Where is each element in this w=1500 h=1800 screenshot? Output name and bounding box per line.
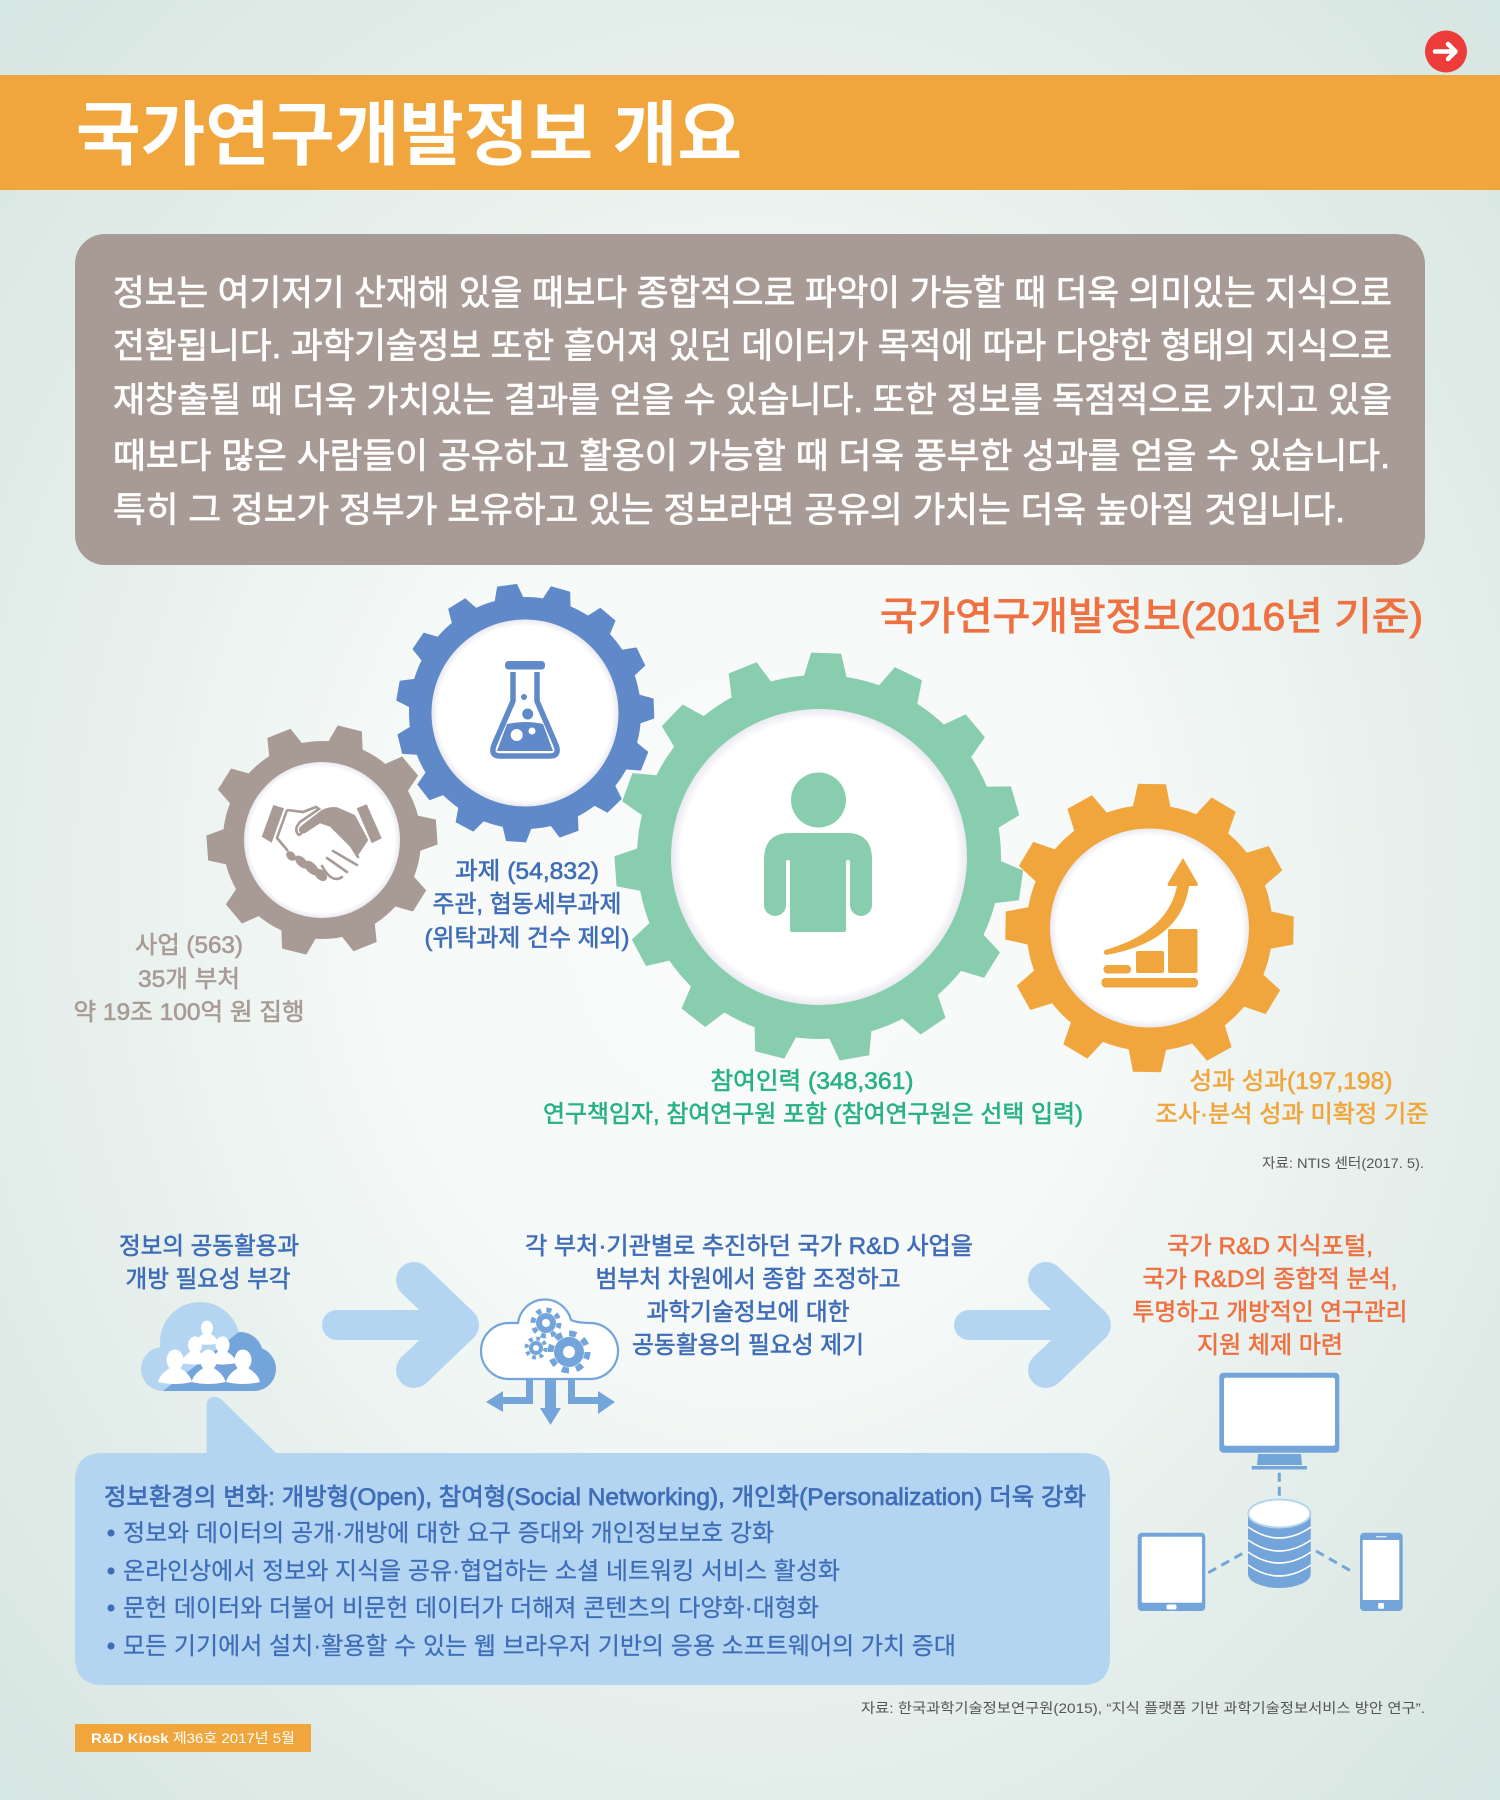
publication tag (75, 1724, 311, 1752)
callout list: 온라인상에서 정보와 지식을 공유·협업하는 소셜 네트워킹 서비스 활성화 (123, 1558, 840, 1585)
flow text: coordination (525, 1233, 973, 1359)
callout list: 모든 기기에서 설치·활용할 수 있는 웹 브라우저 기반의 응용 소프트웨어의 가치 증대 (123, 1633, 956, 1660)
source: NTIS: 자료: NTIS 센터(2017. 5). (1262, 1155, 1424, 1171)
flow text: public use (119, 1233, 299, 1293)
label: projects: 주관, 협동세부과제 (432, 891, 622, 918)
label: business (74, 932, 304, 1026)
title banner (0, 75, 1500, 190)
label: outcomes (1156, 1068, 1428, 1128)
flow text: knowledge portal: 국가 R&D의 종합적 분석, (1142, 1266, 1398, 1293)
introduction text: 때보다 많은 사람들이 공유하고 활용이 가능할 때 더욱 풍부한 성과를 얻을 수 있습니다. (113, 437, 1390, 476)
callout list: 정보와 데이터의 공개·개방에 대한 요구 증대와 개인정보보호 강화 (123, 1520, 774, 1547)
callout list (107, 1520, 956, 1660)
label: personnel: 참여인력 (348,361) (710, 1068, 914, 1095)
flow text: coordination: 각 부처·기관별로 추진하던 국가 R&D 사업을 (525, 1233, 973, 1260)
icon: gears cloud (481, 1299, 618, 1425)
label: projects: (위탁과제 건수 제외) (424, 925, 630, 952)
flow text: knowledge portal: 투명하고 개방적인 연구관리 (1132, 1299, 1408, 1326)
flow text: knowledge portal: 국가 R&D 지식포털, (1167, 1233, 1373, 1260)
introduction text: 특히 그 정보가 정부가 보유하고 있는 정보라면 공유의 가치는 더욱 높아질 것입니다. (113, 491, 1345, 530)
flow text: knowledge portal: 지원 체제 마련 (1197, 1332, 1343, 1359)
icon: people cloud (141, 1302, 276, 1391)
label: personnel: 연구책임자, 참여연구원 포함 (참여연구원은 선택 입력) (543, 1101, 1083, 1128)
flow text: knowledge portal (1132, 1233, 1408, 1359)
icon: handshake (262, 804, 382, 883)
gear: personnel (green) (614, 652, 1024, 1062)
flow text: coordination: 공동활용의 필요성 제기 (632, 1332, 864, 1359)
gear: outcomes (orange) (1005, 784, 1294, 1072)
icon: flask (493, 661, 557, 756)
gear: projects (blue) (395, 583, 654, 843)
icon: red next arrow (1425, 30, 1467, 72)
flow text: coordination: 범부처 차원에서 종합 조정하고 (596, 1266, 900, 1293)
arrow: first (337, 1280, 461, 1370)
callout heading: 정보환경의 변화: 개방형(Open), 참여형(Social Networking), 개인화(Personalization) 더욱 강화 (104, 1484, 1086, 1511)
icon: person (764, 772, 872, 932)
label: business: 사업 (563) (135, 932, 243, 959)
callout list: 문헌 데이터와 더불어 비문헌 데이터가 더해져 콘텐츠의 다양화·대형화 (123, 1595, 819, 1622)
label: business: 약 19조 100억 원 집행 (74, 999, 304, 1026)
arrow: second (969, 1280, 1093, 1370)
icon: connected devices (1138, 1373, 1403, 1611)
introduction text: 정보는 여기저기 산재해 있을 때보다 종합적으로 파악이 가능할 때 더욱 의미있는 지식으로 (113, 274, 1392, 313)
flow text: public use: 개방 필요성 부각 (126, 1266, 290, 1293)
title: 국가연구개발정보 개요 (76, 96, 742, 174)
chart heading: 국가연구개발정보(2016년 기준) (880, 596, 1423, 639)
label: projects (424, 858, 630, 952)
label: projects: 과제 (54,832) (455, 858, 599, 885)
publication tag text: R&D Kiosk 제36호 2017년 5월 (91, 1730, 295, 1746)
label: personnel (543, 1068, 1083, 1128)
flow text: coordination: 과학기술정보에 대한 (646, 1299, 850, 1326)
introduction text (113, 274, 1392, 530)
source: KISTI report: 자료: 한국과학기술정보연구원(2015), “지식 플랫폼 기반 과학기술정보서비스 방안 연구”. (861, 1700, 1425, 1716)
label: outcomes: 성과 성과(197,198) (1190, 1068, 1392, 1095)
introduction text: 재창출될 때 더욱 가치있는 결과를 얻을 수 있습니다. 또한 정보를 독점적으로 가지고 있을 (113, 381, 1392, 420)
panel: introduction (75, 234, 1425, 565)
label: business: 35개 부처 (138, 966, 240, 993)
icon: rising chart (1102, 858, 1198, 988)
flow text: public use: 정보의 공동활용과 (119, 1233, 299, 1260)
gear: business (brown) (206, 724, 438, 956)
introduction text: 전환됩니다. 과학기술정보 또한 흩어져 있던 데이터가 목적에 따라 다양한 형태의 지식으로 (113, 327, 1392, 366)
label: outcomes: 조사·분석 성과 미확정 기준 (1156, 1101, 1428, 1128)
panel: information environment callout (75, 1397, 1110, 1685)
